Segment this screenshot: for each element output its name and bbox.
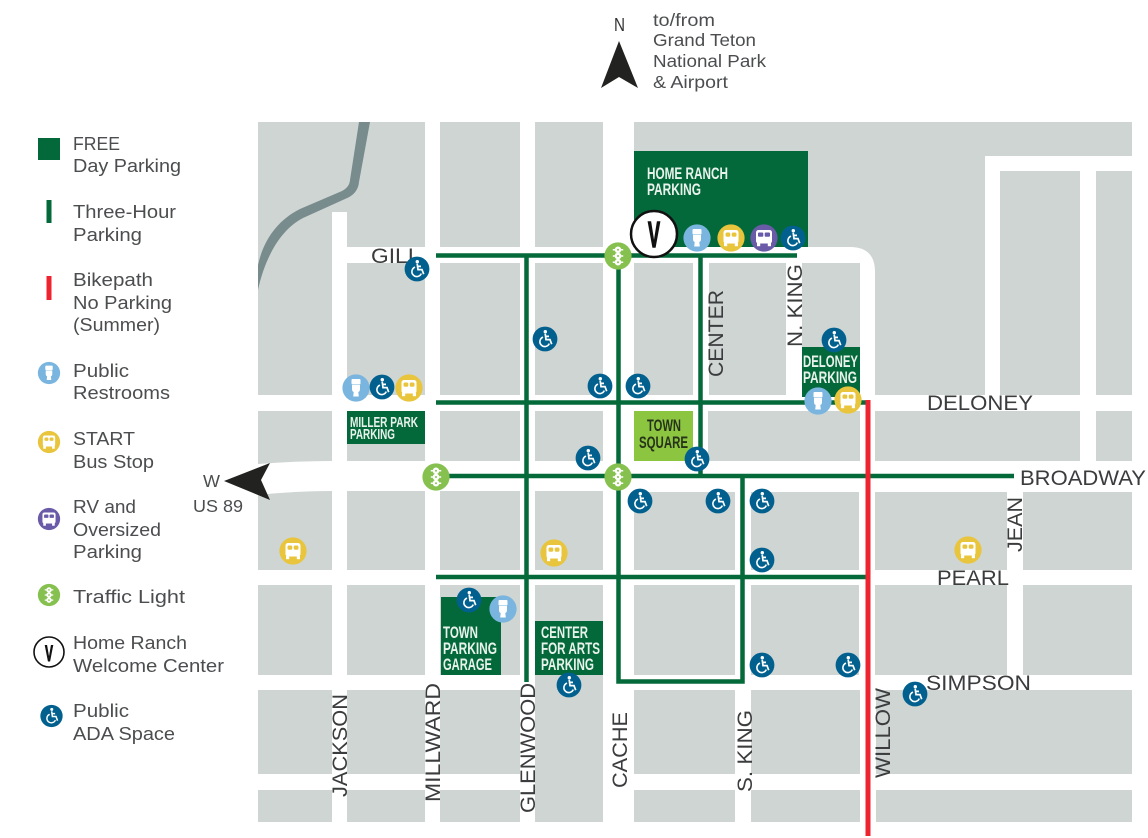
three-hour parking street lines bbox=[436, 256, 1014, 682]
Deloney parking lot: PARKING bbox=[803, 369, 857, 387]
street labels: JEAN bbox=[1004, 497, 1027, 552]
legend: Home Ranch Welcome Center: V bbox=[45, 641, 53, 666]
street labels: GILI bbox=[371, 245, 414, 268]
legend: START bus stop: START bbox=[73, 428, 135, 449]
street labels: S. KING bbox=[734, 710, 757, 792]
street labels: CACHE bbox=[609, 712, 632, 788]
street labels: SIMPSON bbox=[926, 672, 1031, 695]
street labels: N. KING bbox=[784, 264, 807, 347]
label: to/from Grand Teton National Park and Airport: & Airport bbox=[653, 72, 728, 92]
legend: free day parking bbox=[38, 133, 181, 176]
arrow: west US 89 bbox=[224, 463, 270, 500]
street labels: JACKSON bbox=[329, 694, 352, 797]
street labels: MILLWARD bbox=[422, 683, 445, 802]
legend: public restrooms: Restrooms bbox=[73, 382, 170, 403]
Center for Arts parking lot bbox=[535, 621, 603, 675]
legend: free day parking: FREE bbox=[73, 133, 120, 154]
legend: traffic light bbox=[38, 584, 185, 607]
street labels: BROADWAY bbox=[1020, 467, 1146, 490]
street labels: CENTER bbox=[705, 290, 728, 377]
north label: N bbox=[614, 15, 625, 35]
Deloney parking lot bbox=[802, 347, 860, 397]
Town Parking Garage: GARAGE bbox=[443, 656, 492, 674]
legend: bikepath: (Summer) bbox=[73, 314, 160, 335]
legend: bikepath: No Parking bbox=[73, 292, 172, 313]
legend: RV and oversized parking: Oversized bbox=[73, 519, 161, 540]
legend: public restrooms: Public bbox=[73, 360, 129, 381]
label: to/from Grand Teton National Park and Airport: National Park bbox=[653, 51, 766, 71]
legend: public ADA space: ADA Space bbox=[73, 723, 175, 744]
street labels: DELONEY bbox=[927, 392, 1033, 415]
legend: traffic light: Traffic Light bbox=[73, 586, 185, 607]
Center for Arts parking lot: CENTER bbox=[541, 624, 588, 642]
Center for Arts parking lot: PARKING bbox=[541, 656, 594, 674]
legend: free day parking: Day Parking bbox=[73, 155, 181, 176]
legend: RV and oversized parking bbox=[38, 496, 161, 562]
label: to/from Grand Teton National Park and Airport: to/from bbox=[653, 10, 715, 30]
Town Parking Garage bbox=[441, 597, 501, 675]
Deloney parking lot: DELONEY bbox=[803, 353, 858, 371]
legend bbox=[34, 133, 224, 744]
Home Ranch parking lot: HOME RANCH bbox=[647, 165, 728, 183]
label: to/from Grand Teton National Park and Airport: Grand Teton bbox=[653, 30, 756, 50]
legend: START bus stop: Bus Stop bbox=[73, 451, 154, 472]
ADA space icons bbox=[405, 257, 927, 706]
traffic light icons bbox=[422, 242, 632, 491]
legend: public ADA space bbox=[40, 700, 175, 744]
Home Ranch parking lot bbox=[634, 151, 808, 247]
Center for Arts parking lot: FOR ARTS bbox=[541, 640, 600, 658]
legend: START bus stop bbox=[38, 428, 154, 472]
Home Ranch Welcome Center icon: V bbox=[648, 214, 660, 255]
street labels: WILLOW bbox=[872, 688, 895, 778]
bikepath line bbox=[866, 400, 870, 836]
Miller Park parking lot: MILLER PARK bbox=[350, 415, 418, 431]
arrow: north bbox=[601, 41, 638, 88]
legend: three-hour parking: Parking bbox=[73, 224, 142, 245]
Town Square bbox=[634, 411, 693, 461]
Miller Park parking lot: PARKING bbox=[350, 427, 395, 443]
Town Square: TOWN bbox=[647, 417, 681, 435]
legend: RV and oversized parking: RV and bbox=[73, 496, 136, 517]
legend: bikepath: Bikepath bbox=[73, 269, 153, 290]
legend: Home Ranch Welcome Center: Home Ranch bbox=[73, 632, 187, 653]
START bus stop icons bbox=[279, 536, 982, 567]
legend: public ADA space: Public bbox=[73, 700, 129, 721]
river bbox=[258, 122, 370, 290]
legend: three-hour parking: Three-Hour bbox=[73, 201, 176, 222]
legend: Home Ranch Welcome Center bbox=[34, 632, 224, 676]
Town Garage service icons bbox=[457, 588, 517, 623]
legend: Home Ranch Welcome Center: Welcome Center bbox=[73, 655, 224, 676]
Town Square: SQUARE bbox=[639, 434, 688, 452]
Home Ranch Welcome Center icon bbox=[631, 211, 677, 257]
legend: public restrooms bbox=[38, 360, 170, 403]
Town Parking Garage: TOWN bbox=[443, 624, 478, 642]
Home Ranch parking lot: PARKING bbox=[647, 181, 701, 199]
Miller Park service icons bbox=[342, 374, 423, 402]
label: to/from Grand Teton National Park and Airport bbox=[653, 10, 766, 92]
Town Parking Garage: PARKING bbox=[443, 640, 497, 658]
map base: grey city blocks bbox=[258, 122, 1132, 822]
legend: three-hour parking bbox=[46, 200, 176, 245]
legend: RV and oversized parking: Parking bbox=[73, 541, 142, 562]
street labels bbox=[329, 245, 1146, 813]
label: W: W bbox=[203, 471, 220, 491]
street labels: PEARL bbox=[937, 567, 1009, 590]
street labels: GLENWOOD bbox=[517, 683, 540, 813]
Home Ranch service icons bbox=[683, 224, 805, 252]
Miller Park parking lot bbox=[347, 411, 425, 444]
label: US 89: US 89 bbox=[193, 496, 243, 516]
legend: bikepath bbox=[46, 269, 172, 335]
Deloney service icons bbox=[804, 328, 862, 415]
